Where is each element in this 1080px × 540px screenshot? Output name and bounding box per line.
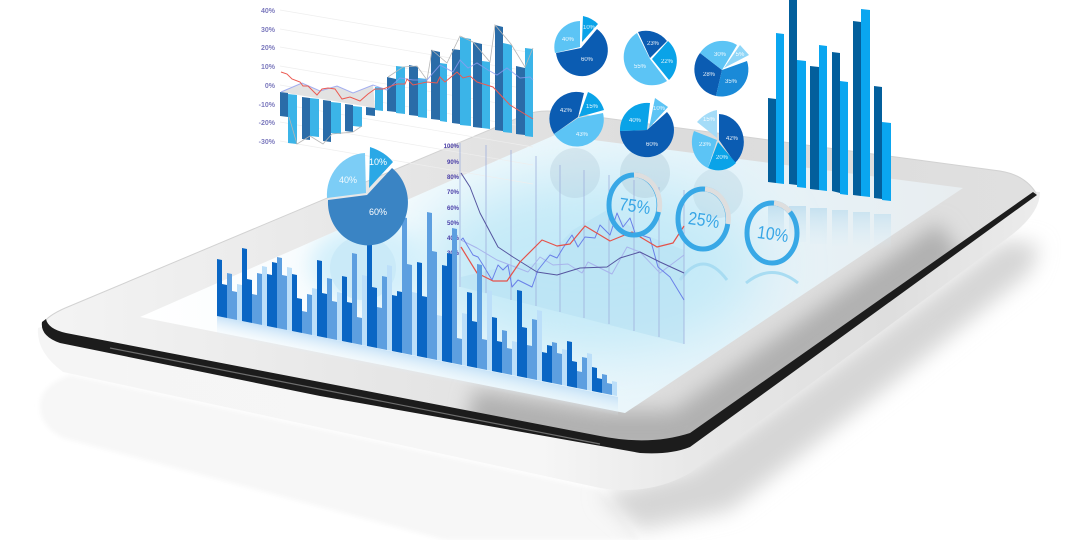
curves [461,173,684,300]
grey zero-line area [281,83,375,108]
donut gauge 25% [678,189,728,249]
axis labels: 20% [261,45,276,52]
pie chart 2: 55% [634,64,647,70]
donut gauge 10% [747,203,797,263]
tablet body [38,111,1040,490]
pie chart 3: 28% [703,72,716,78]
pie chart 5: 40% [629,118,642,124]
percent axis labels: 30% [447,251,460,257]
tablet drop shadow [600,240,1040,530]
pie chart 3: 5% [736,52,745,58]
trend lines [281,25,533,144]
pie chart 2 [624,31,677,85]
percent axis labels: 40% [447,236,460,242]
large pie chart: 10% [369,157,387,167]
pie chart 1: 10% [583,25,596,31]
percent axis labels: 70% [447,190,460,196]
chart: tall paired bars [768,0,891,201]
axis labels: -20% [259,120,276,127]
percent axis labels [444,144,460,257]
tablet lower lip [38,190,1040,490]
tablet reflection on the floor [40,375,640,540]
donut gauge 75%: 75% [618,194,652,218]
pie chart 1: 60% [581,57,594,63]
axis labels: -30% [259,139,276,146]
tablet screen [140,135,963,413]
donut gauge 10%: 10% [756,222,790,246]
reflections of the floating charts [330,148,891,300]
chart: front bar chart on screen [217,212,618,416]
chart: bars and line chart with positive and negative values [259,8,533,184]
pie chart 3: 35% [725,79,738,85]
shaded area under curves [461,210,684,344]
large pie chart [327,147,408,245]
pie chart 3 [694,41,749,97]
axis labels: 30% [261,27,276,34]
axis labels: 0% [265,83,276,90]
percent axis labels: 50% [447,221,460,227]
percent axis labels: 90% [447,160,460,166]
percent axis labels: 80% [447,175,460,181]
tablet black edge [42,192,1037,453]
donut gauge 75% [609,175,660,235]
pie chart 1: 40% [562,37,575,43]
pie chart 4 [549,92,604,147]
pie chart 2: 23% [647,41,660,47]
pie chart 4: 42% [560,108,573,114]
chart: line chart with percent axis [444,143,684,344]
large pie chart: 40% [339,175,357,185]
tablet bezel [44,111,1036,447]
mid blue bars [227,212,612,395]
pie chart 5: 10% [653,106,666,112]
pie chart 1 [554,16,608,76]
axis labels: -10% [259,102,276,109]
axis labels: 40% [261,8,276,15]
pie chart 5 [620,98,674,157]
large pie chart: 60% [369,207,387,217]
axis labels [259,8,276,146]
pie chart 6: 15% [703,117,716,123]
light bars [237,265,617,396]
pie chart 4: 43% [576,132,589,138]
bar reflection band [217,316,618,416]
pie chart 4: 15% [586,104,599,110]
pie chart 6: 20% [716,155,729,161]
paired bars [280,25,533,144]
percent axis labels: 100% [444,144,460,150]
percent axis labels: 60% [447,206,460,212]
pie chart 6: 23% [699,142,712,148]
pie chart 2: 22% [661,59,674,65]
pie chart 3: 30% [714,52,727,58]
pie chart 6: 42% [726,136,739,142]
donut gauge 25%: 25% [687,208,721,232]
dark blue bars [217,243,602,393]
axis labels: 10% [261,64,276,71]
pie chart 5: 60% [646,142,659,148]
pie chart 6 [692,110,744,170]
